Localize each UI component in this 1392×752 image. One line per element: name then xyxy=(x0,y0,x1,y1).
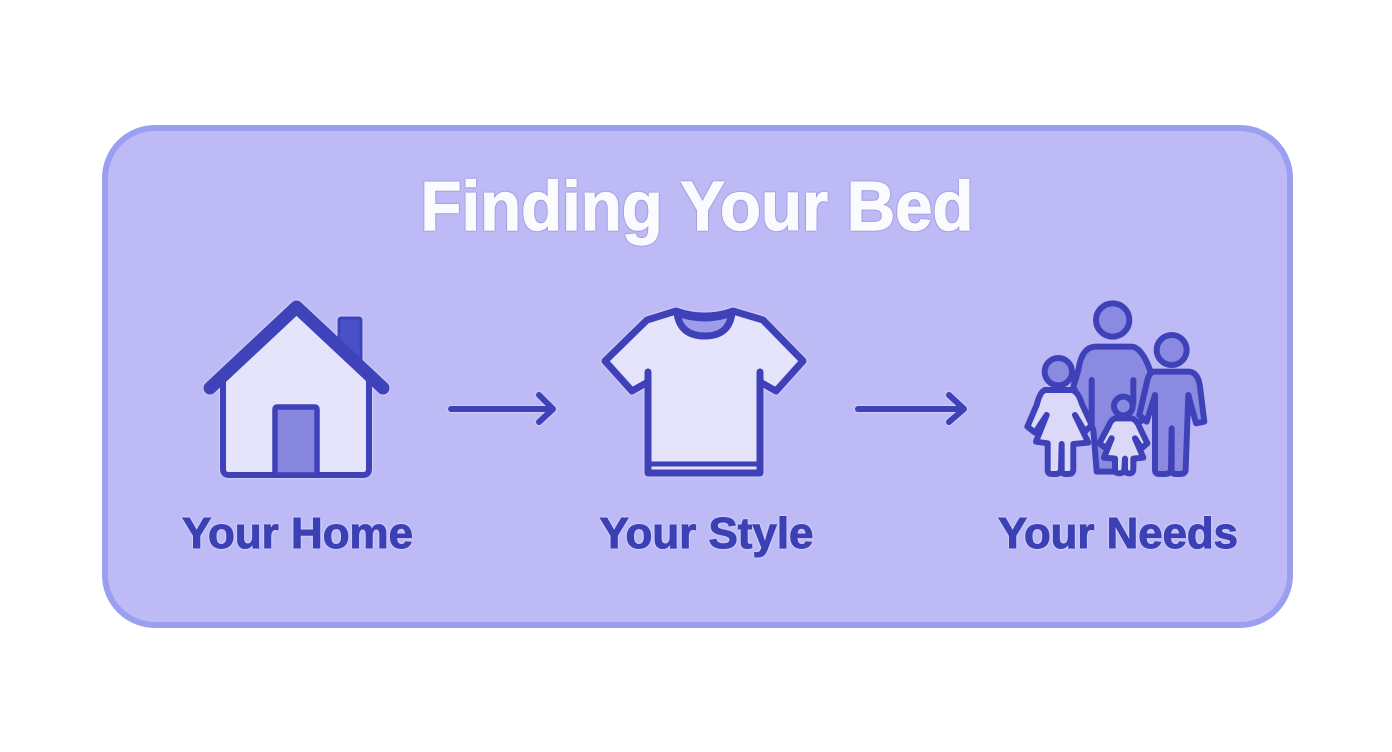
label: your home: Your Home xyxy=(182,509,413,558)
arrow: home to style xyxy=(451,395,553,422)
house chimney xyxy=(339,318,361,368)
shirt hem xyxy=(650,462,758,466)
panel: background card xyxy=(105,128,1290,625)
small child xyxy=(1099,397,1147,473)
label: your style: Your Style xyxy=(600,509,814,558)
house door xyxy=(275,407,317,475)
icon: family xyxy=(1027,303,1204,474)
arrow: style to needs xyxy=(858,395,964,422)
shirt collar xyxy=(677,313,732,336)
girl left xyxy=(1027,358,1092,474)
father xyxy=(1073,303,1153,472)
title: Finding Your Bed xyxy=(420,167,974,245)
label: your needs: Your Needs xyxy=(998,509,1238,558)
shirt body xyxy=(605,311,803,473)
icon: house xyxy=(210,307,383,475)
mother right xyxy=(1139,335,1204,474)
house walls xyxy=(223,315,369,475)
icon: t-shirt xyxy=(605,311,803,473)
shirt armholes xyxy=(648,372,760,382)
house wall outline xyxy=(223,381,369,475)
house roof xyxy=(210,307,383,388)
